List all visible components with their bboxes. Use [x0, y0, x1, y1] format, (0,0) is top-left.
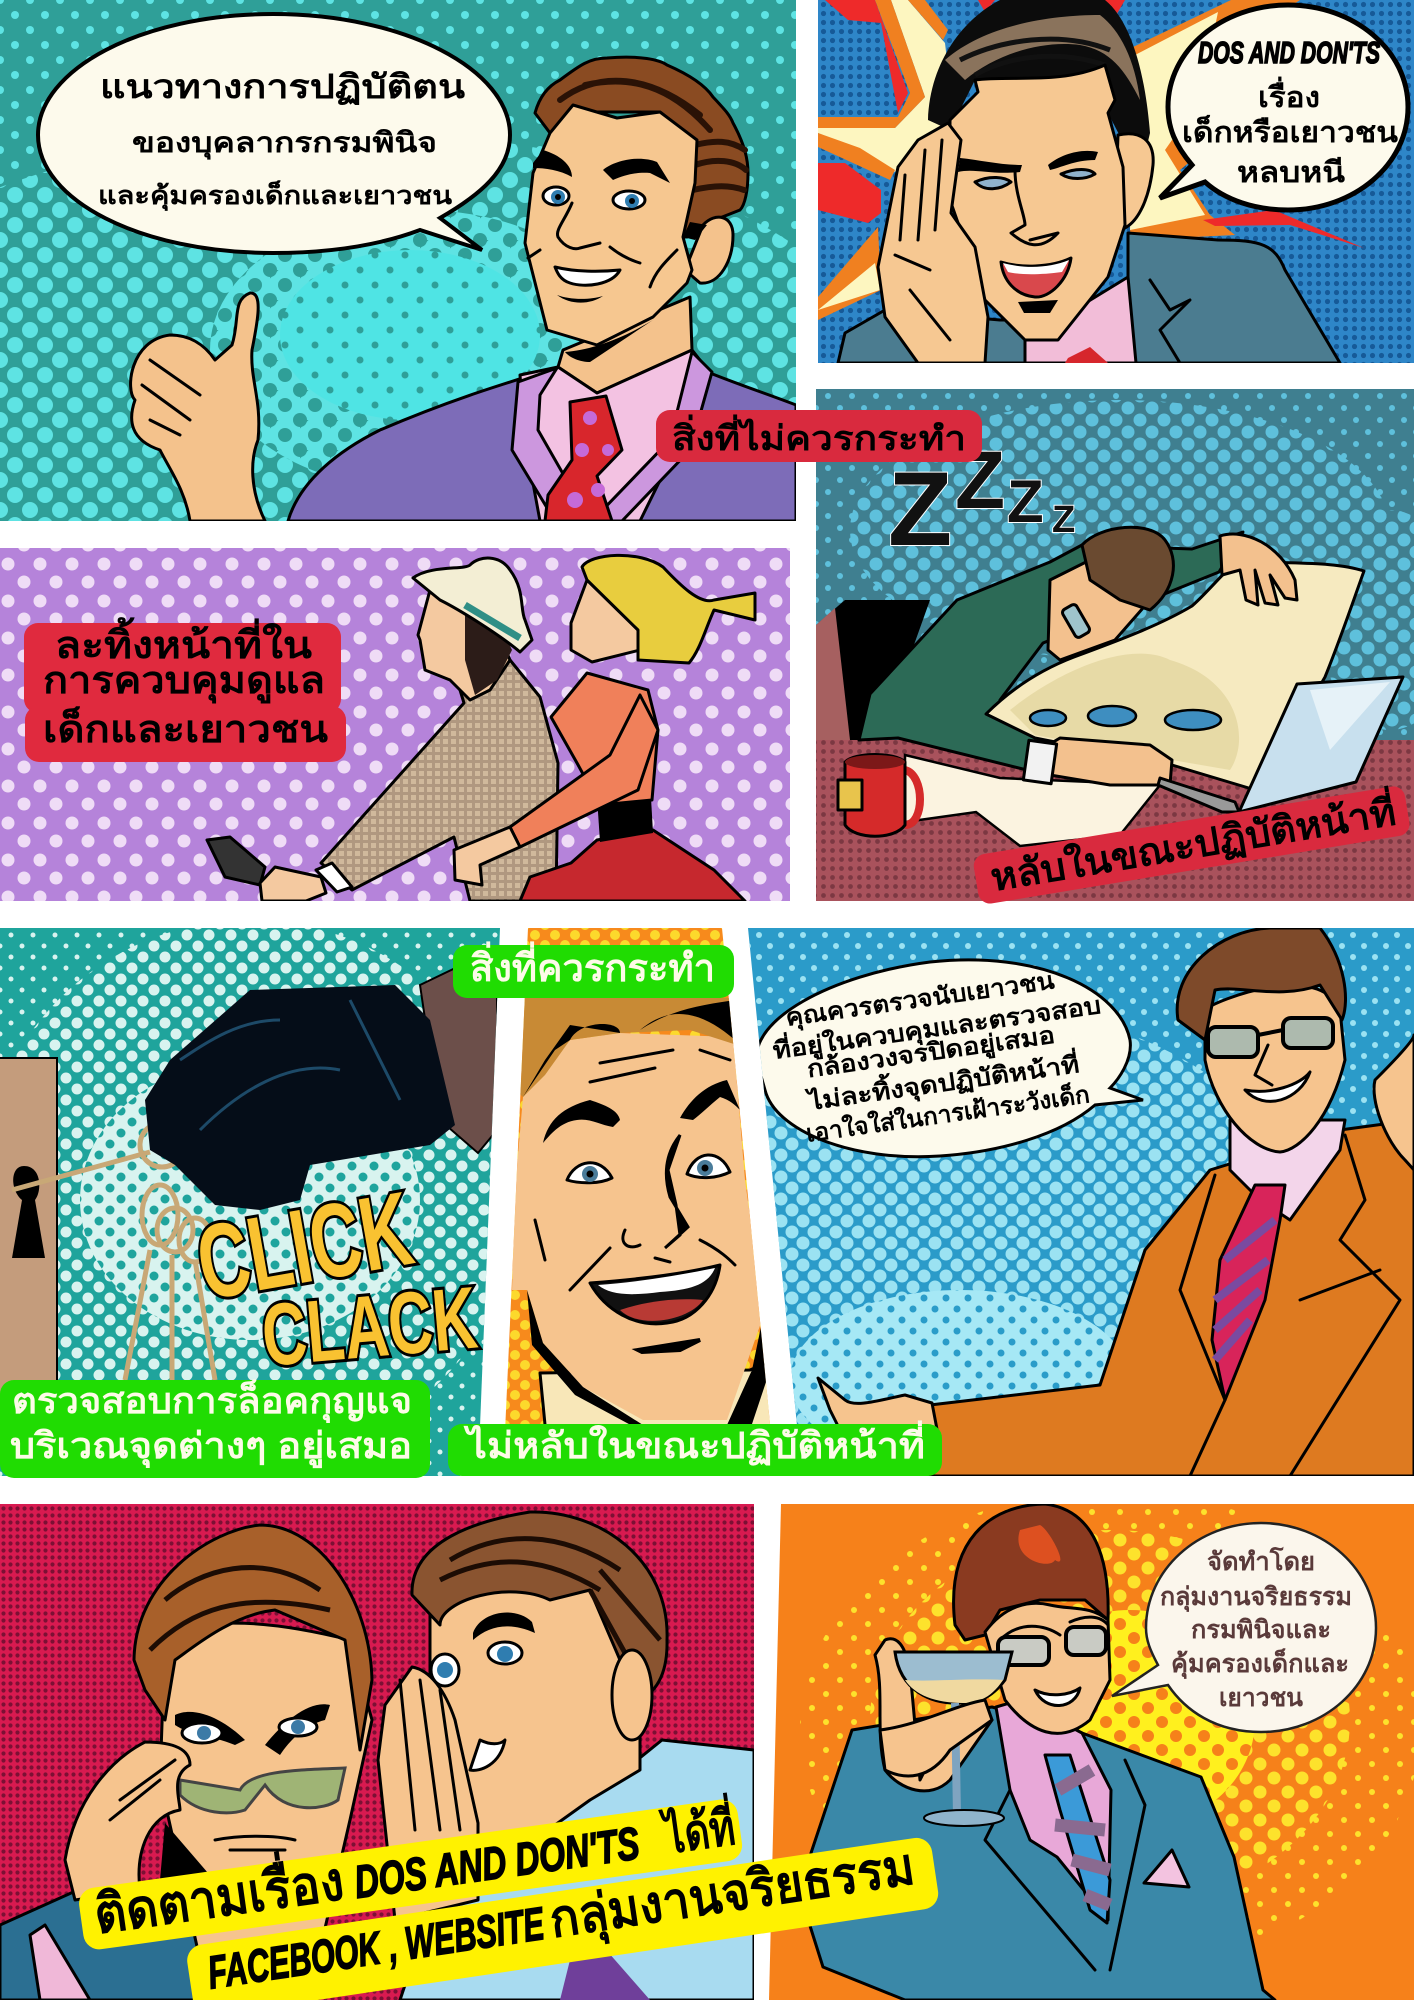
icon: red mug: [838, 754, 920, 836]
credit line 2: กลุ่มงานจริยธรรม: [1160, 1583, 1352, 1613]
icon: chair: [816, 600, 930, 740]
green label: check the locks: ตรวจสอบการล็อคกุญแจ: [12, 1378, 412, 1424]
speech bubble: dos and don'ts: [1160, 5, 1408, 210]
thai line 3: หลบหนี: [1237, 157, 1345, 189]
green label: check the locks: [0, 1378, 430, 1478]
thai line 2: เด็กหรือเยาวชน: [1182, 114, 1398, 149]
credit line 3: กรมพินิจและ: [1191, 1616, 1331, 1644]
red label: abandoning duty: [24, 617, 346, 762]
speech bubble: advice: [757, 960, 1143, 1157]
speech bubble: credits: [1112, 1523, 1376, 1732]
figure: scooter couple: [207, 555, 755, 901]
panel: excited man's face: [505, 928, 770, 1424]
icon: thumbs-up hand: [131, 293, 265, 521]
zzz sleeping letters: Z: [888, 451, 952, 568]
yellow banner: follow line 1: DOS AND DON'TS: [351, 1817, 643, 1908]
figure: right man whispering: [378, 1512, 754, 2000]
title line 2: ของบุคลากรกรมพินิจ: [132, 127, 437, 160]
yellow banner: follow line 1: ติดตามเรื่อง: [89, 1842, 347, 1945]
zzz sleeping letters: [890, 450, 1076, 546]
yellow banner: follow line 2: [185, 1835, 940, 2000]
thai line 1: เรื่อง: [1258, 76, 1320, 114]
click clack sound words: CLICK: [189, 1170, 421, 1323]
title line 3: และคุ้มครองเด็กและเยาวชน: [98, 180, 452, 212]
red label: sleeping on duty: หลับในขณะปฏิบัติหน้าที่: [986, 785, 1399, 900]
icon: hand and glass: [875, 1639, 992, 1791]
figure: left man with sunglasses: [0, 1525, 372, 2000]
figure: man with hand to mouth: [838, 0, 1340, 363]
panel: man raising a glass: [769, 1490, 1414, 2000]
red label: abandoning duty: เด็กและเยาวชน: [43, 706, 328, 751]
green heading: things to do: [453, 941, 734, 998]
advice line 2: ที่อยู่ในควบคุมและตรวจสอบ: [770, 987, 1103, 1067]
credit line 4: คุ้มครองเด็กและ: [1171, 1648, 1349, 1680]
panel: two men whispering: [0, 1504, 754, 2000]
red label: abandoning duty: ละทิ้งหน้าที่ใน: [55, 617, 312, 667]
credit line 1: จัดทำโดย: [1207, 1546, 1315, 1576]
speech bubble: title: [38, 14, 510, 253]
yellow banner: follow line 2: FACEBOOK , WEBSITE: [204, 1897, 548, 1999]
green label: check the locks: บริเวณจุดต่างๆ อยู่เสมอ: [10, 1425, 412, 1469]
figure: man in orange suit: [818, 928, 1414, 1476]
advice line 1: คุณควรตรวจนับเยาวชน: [784, 967, 1057, 1034]
credit line 5: เยาวชน: [1219, 1684, 1303, 1712]
panel: gloved hand with key: [0, 920, 520, 1476]
green label: stay awake on duty: [448, 1420, 942, 1476]
explosion star: [818, 0, 1364, 320]
panel: couple on scooter: [0, 548, 790, 901]
red label: abandoning duty: การควบคุมดูแล: [43, 660, 325, 704]
icon: key ring and keys: [12, 1123, 215, 1380]
panel: man in orange suit with speech bubble: [748, 928, 1414, 1476]
panel: thumbs-up man with title bubble: [0, 0, 796, 521]
icon: pillow eyes: [1030, 706, 1221, 730]
figure: smiling man: [288, 57, 796, 521]
zzz sleeping letters: Z: [1007, 468, 1044, 535]
icon: laptop: [1158, 677, 1403, 812]
title line 1: แนวทางการปฏิบัติตน: [100, 68, 466, 105]
green label: stay awake on duty: ไม่หลับในขณะปฏิบัติหน้าที่: [463, 1420, 925, 1466]
zzz sleeping letters: Z: [1052, 499, 1075, 541]
yellow banner: follow line 2: กลุ่มงานจริยธรรม: [546, 1838, 919, 1952]
advice line 5: เอาใจใส่ในการเฝ้าระวังเด็ก: [804, 1079, 1091, 1148]
green heading: things to do: สิ่งที่ควรกระทำ: [470, 941, 715, 990]
advice line 3: กล้องวงจรปิดอยู่เสมอ: [805, 1022, 1057, 1084]
icon: black glove: [145, 948, 497, 1210]
door plate and keyhole: [0, 1058, 57, 1398]
figure: sleeping man: [859, 527, 1364, 792]
red heading: things not to do: สิ่งที่ไม่ควรกระทำ: [672, 414, 966, 458]
papers: [905, 755, 1160, 846]
yellow banner: follow line 1: ได้ที่: [657, 1792, 739, 1865]
figure: man with martini glass: [805, 1504, 1275, 2000]
click clack sound words: [198, 1188, 483, 1368]
click clack sound words: CLACK: [258, 1268, 481, 1385]
advice line 4: ไม่ละทิ้งจุดปฏิบัติหน้าที่: [803, 1045, 1081, 1118]
panel: man sleeping on pillow: [816, 389, 1414, 901]
panel: man whispering with explosion background: [818, 0, 1414, 363]
desk: [816, 740, 1414, 901]
zzz sleeping letters: Z: [955, 435, 1005, 526]
figure: wide-eyed man: [512, 998, 770, 1424]
red heading: things not to do: [656, 410, 982, 462]
yellow banner: follow line 1: [75, 1787, 744, 1951]
